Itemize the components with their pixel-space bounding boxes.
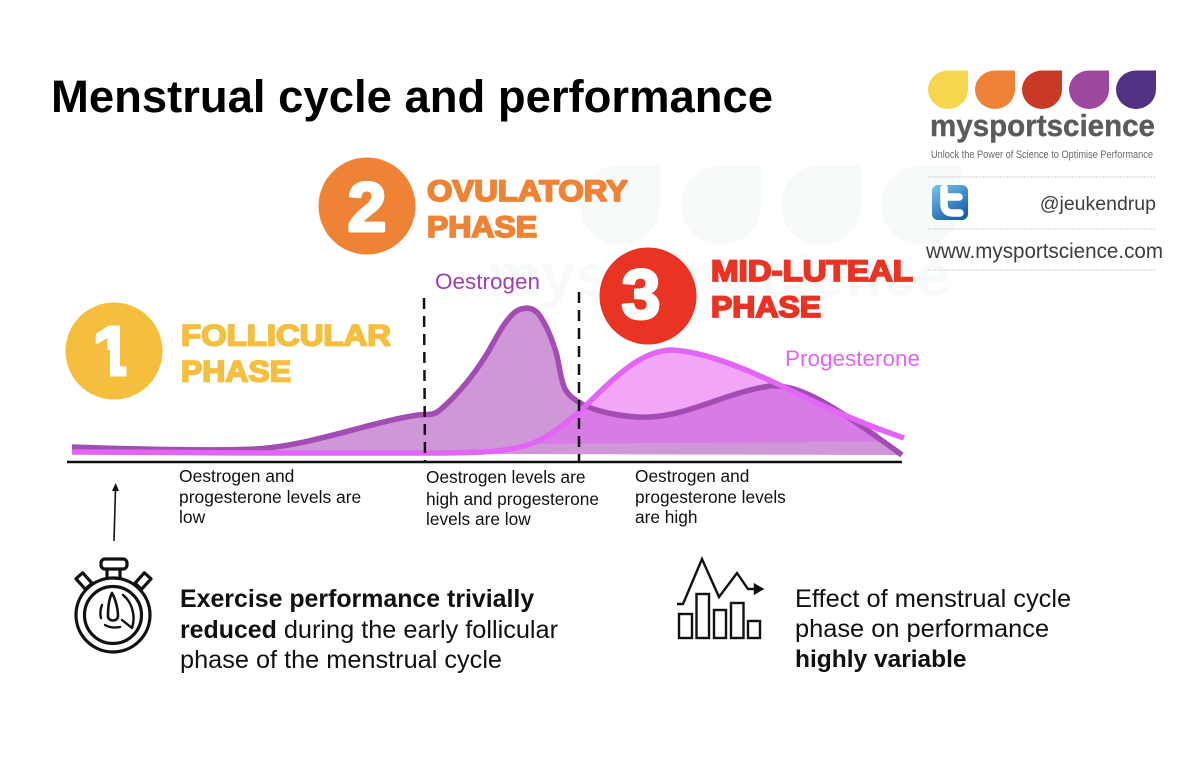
label: follicular phase: FOLLICULAR [181,320,391,352]
performance note: follicular: phase of the menstrual cycle [180,646,502,674]
label: ovulatory phase: OVULATORY [427,175,628,208]
overlap area [538,388,878,444]
performance note: variable: highly variable [795,646,967,673]
logo wordmark: mysportscience [930,108,1155,143]
note: follicular levels [179,466,361,527]
label: oestrogen: Oestrogen [435,269,540,294]
watermark logo [487,165,961,309]
note: luteal levels: Oestrogen and [635,466,749,486]
performance note: variable: phase on performance [795,615,1049,643]
note: follicular levels: progesterone levels are [179,487,361,507]
watermark logo: mysportscience [487,242,950,309]
badge 1 [66,302,162,400]
phase 1 heading [66,302,391,400]
progesterone curve [72,350,904,453]
label: progesterone: Progesterone [785,346,920,371]
note: luteal levels: progesterone levels [635,487,786,507]
title: Menstrual cycle and performance [51,71,773,122]
performance note: follicular: reduced during the early follicular [180,616,558,644]
oestrogen area [72,308,902,455]
note: luteal levels: are high [635,507,697,527]
logo drops [928,70,1156,109]
website: www.mysportscience.com [925,240,1163,263]
phase 3 heading [600,248,913,344]
performance note: follicular [180,585,558,674]
note: luteal levels [635,466,786,527]
progesterone area [533,350,878,444]
icon: twitter [932,185,968,220]
label: follicular phase: PHASE [181,356,291,388]
arrow up [112,483,119,541]
note: ovulatory levels [426,467,599,529]
badge 1: 1 [93,312,131,390]
logo tagline: Unlock the Power of Science to Optimise Performance [931,149,1153,161]
label: mid-luteal phase: PHASE [711,291,821,324]
hormone chart [67,269,920,462]
note: follicular levels: low [179,507,206,527]
performance note: follicular: Exercise performance trivially [180,585,534,613]
phase divider dashes [424,292,579,462]
note: ovulatory levels: Oestrogen levels are [426,467,585,487]
performance note: variable [795,585,1071,673]
note: follicular levels: Oestrogen and [179,466,294,486]
logo block: mysportscience [925,70,1163,270]
badge 2 [318,158,416,254]
x axis [67,461,902,463]
label: ovulatory phase [427,175,628,244]
icon: stopwatch [76,559,151,652]
phase 2 heading [318,158,628,254]
note: ovulatory levels: high and progesterone [426,489,599,509]
badge 3 [600,248,696,344]
label: follicular phase [181,320,391,388]
badge 2: 2 [348,168,386,246]
performance note: variable: Effect of menstrual cycle [795,585,1071,613]
oestrogen curve [72,308,902,455]
badge 3: 3 [622,255,660,333]
label: mid-luteal phase [711,255,913,324]
label: mid-luteal phase: MID-LUTEAL [711,255,913,288]
icon: bar chart with trend line [677,559,762,638]
note: ovulatory levels: levels are low [426,509,531,529]
label: ovulatory phase: PHASE [427,211,537,244]
twitter handle: @jeukendrup [1040,193,1156,215]
